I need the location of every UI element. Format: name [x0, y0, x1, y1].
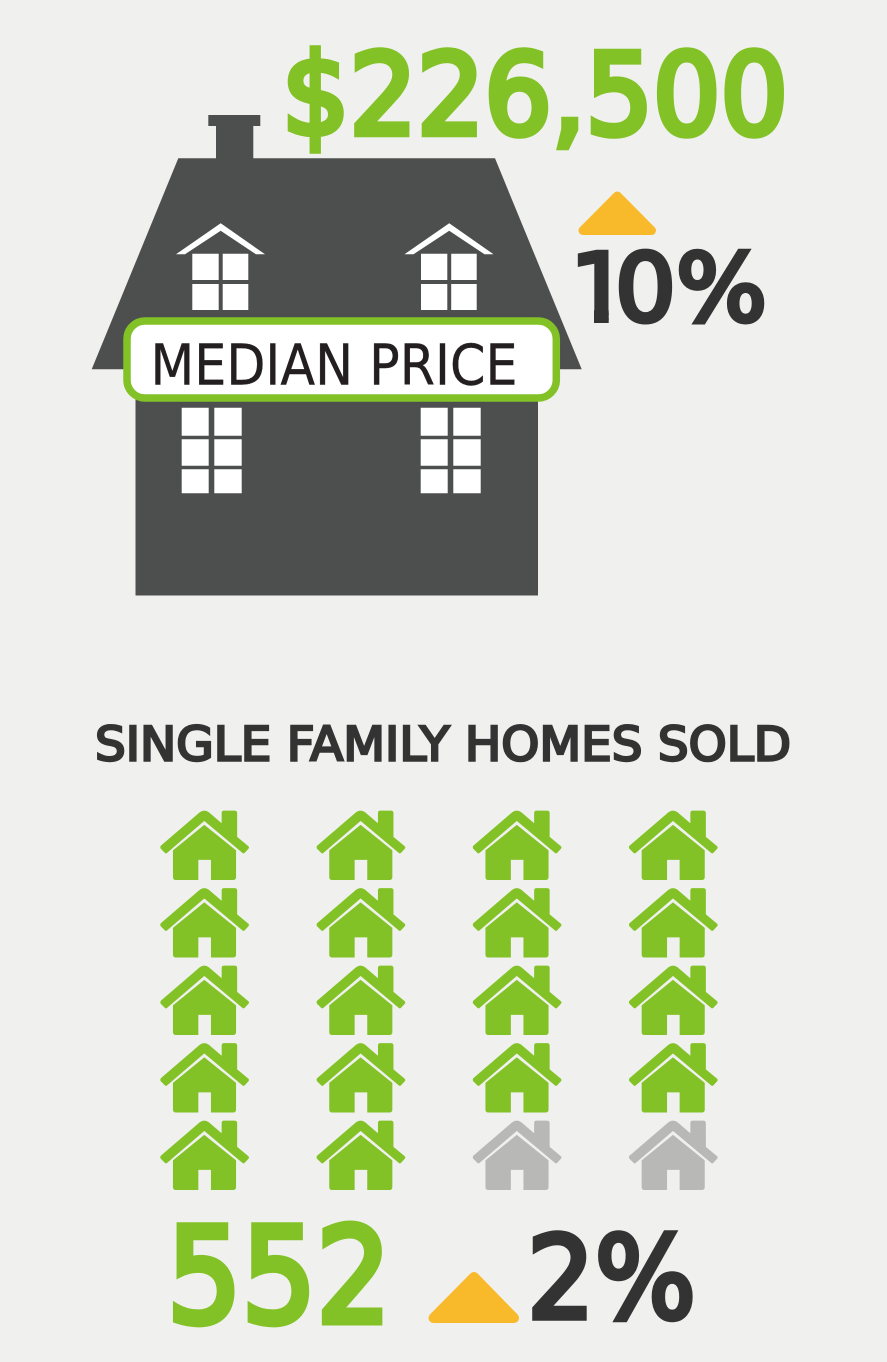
homes sold heading: SINGLE FAMILY HOMES SOLD: [95, 718, 791, 772]
median price badge: [127, 321, 556, 398]
icon grid: homes sold: [161, 811, 717, 1190]
badge label: MEDIAN PRICE: [150, 334, 518, 398]
icon: homes sold up arrow: [434, 1277, 514, 1318]
house body: [136, 369, 538, 596]
price change percent: 0%: [615, 234, 767, 344]
right dormer window: [421, 254, 477, 310]
icon: large house: [92, 115, 582, 596]
price change percent: [578, 248, 764, 324]
homes sold change percent: 2%: [527, 1212, 696, 1345]
row 5 green homes: [161, 1121, 405, 1190]
price change percent: 1: [570, 234, 630, 344]
row 3 homes: [161, 966, 717, 1035]
icon: price up arrow: [583, 196, 652, 230]
roof: [92, 158, 582, 369]
median price value: $226,500: [282, 31, 788, 161]
row 5 grey homes: [473, 1121, 717, 1190]
right lower window: [421, 408, 481, 493]
left dormer window: [192, 254, 248, 310]
row 2 homes: [161, 888, 717, 957]
left lower window: [182, 408, 242, 493]
row 4 homes: [161, 1044, 717, 1112]
row 1 homes: [161, 811, 717, 880]
right dormer roof: [404, 223, 494, 254]
badge box: [127, 321, 556, 398]
chimney: [208, 115, 260, 160]
left dormer roof: [176, 223, 265, 254]
homes sold count: 552: [167, 1200, 391, 1354]
